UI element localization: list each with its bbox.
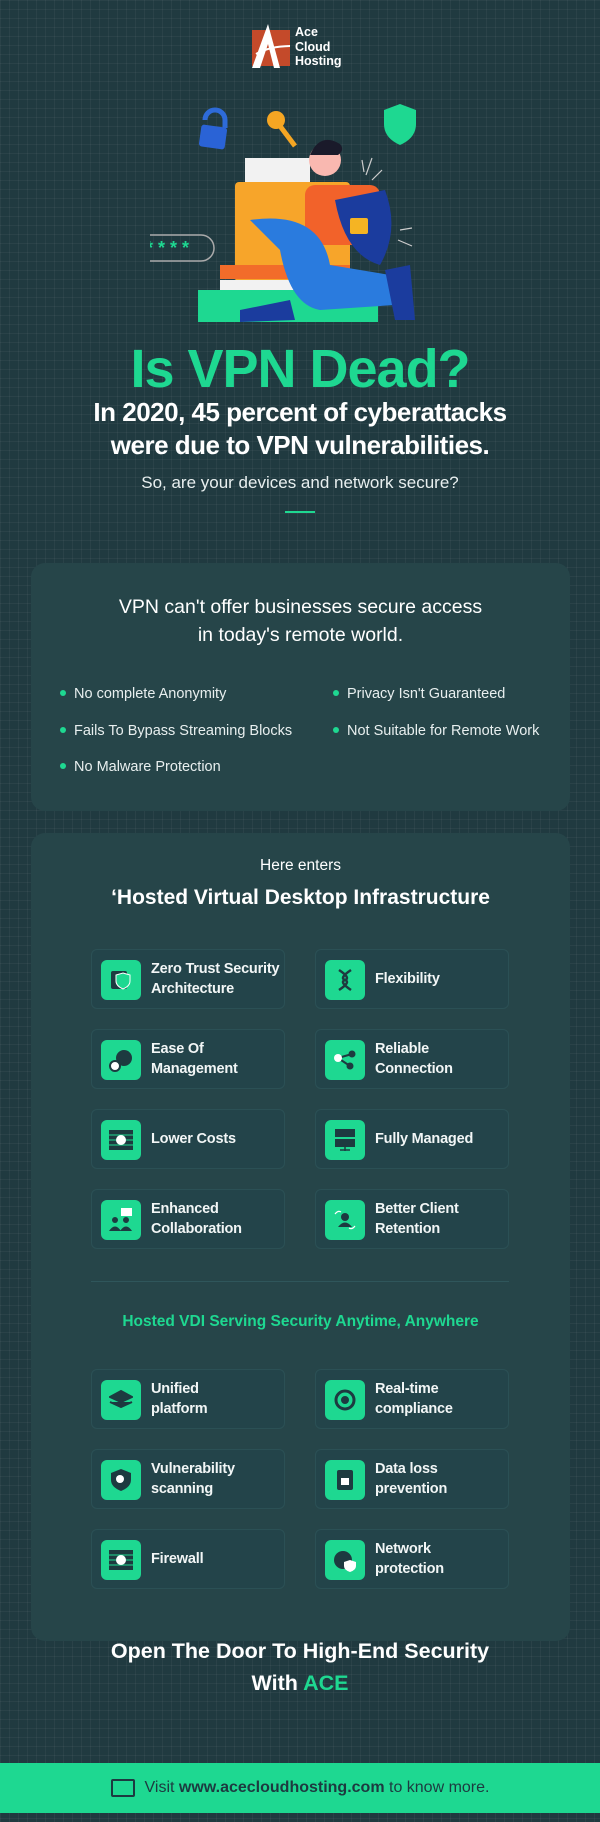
benefits grid: Management	[151, 1061, 238, 1077]
security features grid: Firewall	[151, 1551, 203, 1567]
benefits grid: Ease Of	[151, 1041, 204, 1057]
benefits grid: Reliable	[375, 1041, 429, 1057]
benefits grid: Better Client	[375, 1201, 459, 1217]
closing call to action	[111, 1639, 489, 1695]
logo	[252, 24, 342, 68]
footer band	[0, 1763, 600, 1813]
intro: Here enters	[260, 857, 341, 874]
panel: Hosted VDI	[31, 833, 570, 1641]
benefits grid: Zero Trust Security	[151, 961, 279, 977]
question text: So, are your devices and network secure?	[141, 473, 459, 492]
panel heading: in today's remote world.	[198, 624, 403, 646]
security features grid: Vulnerability	[151, 1461, 235, 1477]
bullet list	[60, 686, 540, 775]
logo: Hosting	[295, 54, 342, 68]
hero illustration	[150, 104, 416, 322]
benefits grid: Flexibility	[375, 971, 440, 987]
panel heading: VPN can't offer businesses secure access	[119, 596, 482, 618]
icon: key	[267, 111, 295, 146]
security features grid: Data loss	[375, 1461, 438, 1477]
subtitle	[93, 397, 507, 460]
bullet list: Fails To Bypass Streaming Blocks	[74, 723, 292, 739]
logo: Cloud	[295, 40, 330, 54]
benefits grid: Fully Managed	[375, 1131, 473, 1147]
icon: laptop	[110, 1779, 134, 1797]
bullet list: No Malware Protection	[74, 759, 221, 775]
icon: shield	[384, 104, 416, 145]
security features grid: Unified	[151, 1381, 199, 1397]
bullet list: Not Suitable for Remote Work	[347, 723, 539, 739]
benefits grid: Architecture	[151, 981, 234, 997]
benefits grid: Connection	[375, 1061, 453, 1077]
footer band: Visit www.acecloudhosting.com to know more.	[144, 1779, 489, 1796]
closing call to action: With ACE	[252, 1671, 348, 1695]
panel: VPN limitations	[31, 563, 570, 811]
benefits grid: Enhanced	[151, 1201, 219, 1217]
subtitle: In 2020, 45 percent of cyberattacks	[93, 397, 507, 427]
logo: Ace	[295, 25, 318, 39]
benefits grid: Collaboration	[151, 1221, 242, 1237]
security features grid: Network	[375, 1541, 431, 1557]
benefits grid: Lower Costs	[151, 1131, 236, 1147]
bullet list: No complete Anonymity	[74, 686, 226, 702]
bullet list: Privacy Isn't Guaranteed	[347, 686, 505, 702]
security features grid: Real-time	[375, 1381, 438, 1397]
security features grid: scanning	[151, 1481, 213, 1497]
benefits grid	[91, 949, 509, 1249]
security features grid: protection	[375, 1561, 444, 1577]
benefits grid: Retention	[375, 1221, 440, 1237]
closing call to action: Open The Door To High-End Security	[111, 1639, 489, 1663]
subtitle: were due to VPN vulnerabilities.	[111, 430, 489, 460]
panel heading	[119, 596, 482, 646]
heading: ‘Hosted Virtual Desktop Infrastructure	[111, 886, 490, 909]
icon: blue lock	[199, 110, 227, 150]
security features grid	[91, 1369, 509, 1589]
security features grid: prevention	[375, 1481, 447, 1497]
title: Is VPN Dead?	[130, 339, 470, 399]
security features grid: compliance	[375, 1401, 453, 1417]
green subheading: Hosted VDI Serving Security Anytime, Anywhere	[122, 1313, 479, 1330]
security features grid: platform	[151, 1401, 207, 1417]
